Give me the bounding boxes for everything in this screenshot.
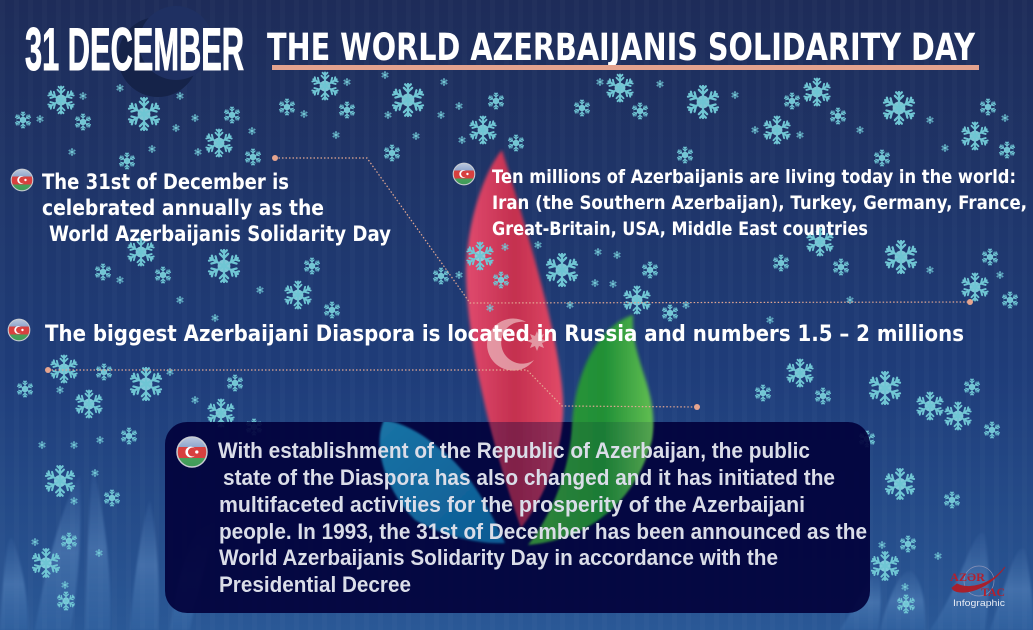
icon: flag	[8, 319, 30, 341]
crescent and star on flame	[487, 319, 547, 371]
title underline	[272, 65, 979, 70]
red flame	[466, 150, 563, 528]
connector end dots	[45, 155, 973, 410]
flame emblem	[466, 150, 653, 545]
flames seen through the panel	[378, 422, 655, 546]
title: 31 December: 31 DECEMBER	[25, 16, 244, 83]
logo: AzerTAc Infographic: TAC	[981, 585, 1005, 599]
panel: republic and decree: With establishment of the Republic of Azerbaijan, the public	[218, 438, 810, 463]
background ice blades	[0, 465, 1033, 630]
panel: republic and decree: Presidential Decree	[219, 572, 411, 597]
panel: republic and decree	[165, 422, 870, 613]
text block: ten millions: Great-Britain, USA, Middle East countries	[492, 218, 868, 240]
panel: republic and decree: people. In 1993, the 31st of December has been announced as the	[219, 519, 867, 544]
icon: flag	[11, 169, 33, 191]
text block: solidarity day: World Azerbaijanis Solidarity Day	[49, 222, 391, 246]
dotted connector lines	[48, 158, 970, 407]
text block: ten millions	[453, 163, 1027, 240]
text block: solidarity day	[11, 169, 391, 246]
moon crescent	[118, 6, 213, 97]
icon: flag	[453, 163, 475, 185]
icon: flag	[177, 437, 207, 467]
logo: AzerTAc Infographic: AZƏR	[950, 570, 985, 584]
logo: AzerTAc Infographic	[950, 566, 1005, 609]
panel: republic and decree: state of the Diaspora has also changed and it has initiated the	[223, 465, 835, 490]
panel: republic and decree: World Azerbaijanis Solidarity Day in accordance with the	[219, 545, 778, 570]
text block: solidarity day: celebrated annually as the	[42, 196, 324, 220]
text block: solidarity day: The 31st of December is	[42, 170, 289, 194]
green flame	[528, 315, 653, 545]
logo: AzerTAc Infographic: Infographic	[953, 598, 1005, 609]
panel: republic and decree: multifaceted activities for the prosperity of the Azerbaijani	[219, 492, 805, 517]
